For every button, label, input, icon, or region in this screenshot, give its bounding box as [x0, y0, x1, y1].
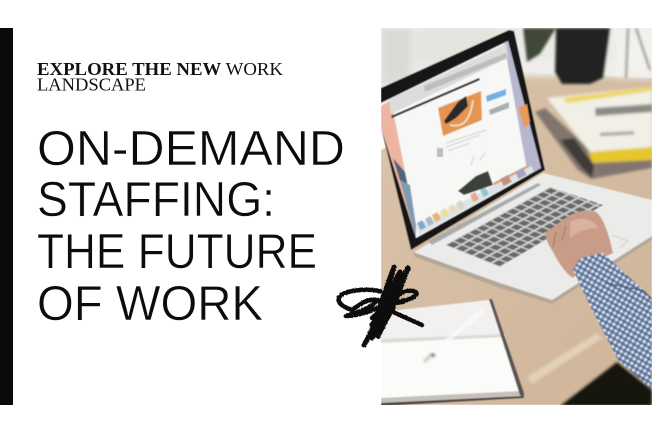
- title: OF WORK: [37, 277, 263, 331]
- title: ON-DEMAND: [37, 122, 345, 176]
- laptop base: [413, 173, 652, 302]
- screen wallpaper left: [381, 100, 416, 238]
- stack of books: [535, 87, 652, 179]
- photo: laptop on desk: [381, 28, 652, 406]
- title: THE FUTURE: [37, 225, 317, 279]
- product photo on screen: [438, 91, 482, 136]
- keyboard: [445, 187, 603, 267]
- laptop lid: [381, 30, 545, 250]
- hand: [545, 210, 613, 278]
- screen text and second product: [446, 130, 486, 165]
- trackpad edge: [612, 235, 628, 248]
- desk edge highlight: [527, 333, 602, 384]
- scribble mark: [339, 267, 422, 345]
- eyebrow text: LANDSCAPE: [37, 74, 146, 94]
- shirt sleeve: [573, 253, 652, 390]
- dock icons: [416, 166, 534, 235]
- left black bar: [0, 28, 13, 405]
- screen wallpaper right: [504, 41, 541, 175]
- eyebrow text: [37, 59, 283, 94]
- laptop screen: [381, 41, 541, 238]
- hinge strip: [428, 183, 541, 245]
- pen: [424, 310, 484, 362]
- browser bar: [389, 44, 508, 114]
- dark floor: [560, 362, 652, 406]
- title: [37, 122, 345, 331]
- screen buttons: [486, 89, 506, 102]
- notebook: [381, 300, 501, 340]
- blurred sofa and wall: [381, 28, 652, 83]
- plant and pot: [523, 28, 650, 84]
- title: STAFFING:: [37, 173, 275, 227]
- desk surface: [381, 72, 652, 405]
- background wall: [381, 28, 652, 88]
- eyebrow text: EXPLORE THE NEW WORK: [37, 59, 283, 79]
